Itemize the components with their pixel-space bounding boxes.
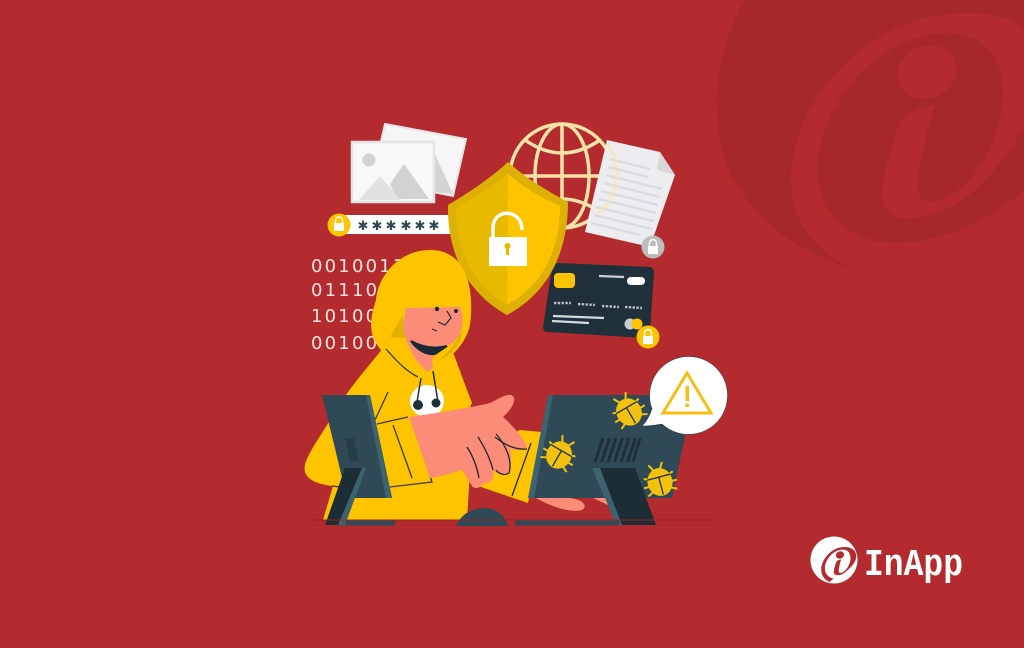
credit card xyxy=(543,263,660,348)
right sleeve xyxy=(478,430,542,503)
skull print xyxy=(410,371,444,417)
image cards xyxy=(352,124,466,202)
password field: ✱ xyxy=(386,219,396,234)
password field: ✱ xyxy=(372,219,382,234)
other hand under monitor xyxy=(536,498,608,511)
hood xyxy=(371,250,471,374)
bug icon: left xyxy=(537,430,583,476)
binary code text: 10100110 xyxy=(311,306,418,327)
left monitor xyxy=(322,395,395,526)
left hand xyxy=(409,395,531,496)
document xyxy=(585,140,675,258)
InApp logo xyxy=(810,536,963,587)
hacker figure xyxy=(305,250,685,526)
hoodie body xyxy=(305,348,472,520)
mouse xyxy=(456,508,508,526)
password field: ✱ xyxy=(401,219,411,234)
face xyxy=(403,307,463,372)
password field: ✱ xyxy=(358,219,368,234)
binary code text xyxy=(311,256,418,354)
binary code text: 00100110 xyxy=(311,256,418,277)
hoodie creases xyxy=(332,349,432,487)
globe xyxy=(510,124,614,228)
bug icon: right xyxy=(639,459,680,500)
binary code text: 01110001 xyxy=(311,280,418,301)
bug icon: top xyxy=(605,387,651,433)
warning speech bubble xyxy=(642,356,728,434)
watermark: InApp logo mark xyxy=(717,0,1024,268)
password field: ✱ xyxy=(429,219,439,234)
password field xyxy=(328,214,460,236)
binary code text: 00100101 xyxy=(311,333,418,354)
right monitor xyxy=(515,395,685,526)
logo wordmark: InApp xyxy=(864,544,963,587)
password field: ✱ xyxy=(415,219,425,234)
ground line xyxy=(305,519,712,521)
security shield xyxy=(448,162,568,315)
logo mark xyxy=(810,536,858,584)
icon: padlock xyxy=(489,213,527,266)
